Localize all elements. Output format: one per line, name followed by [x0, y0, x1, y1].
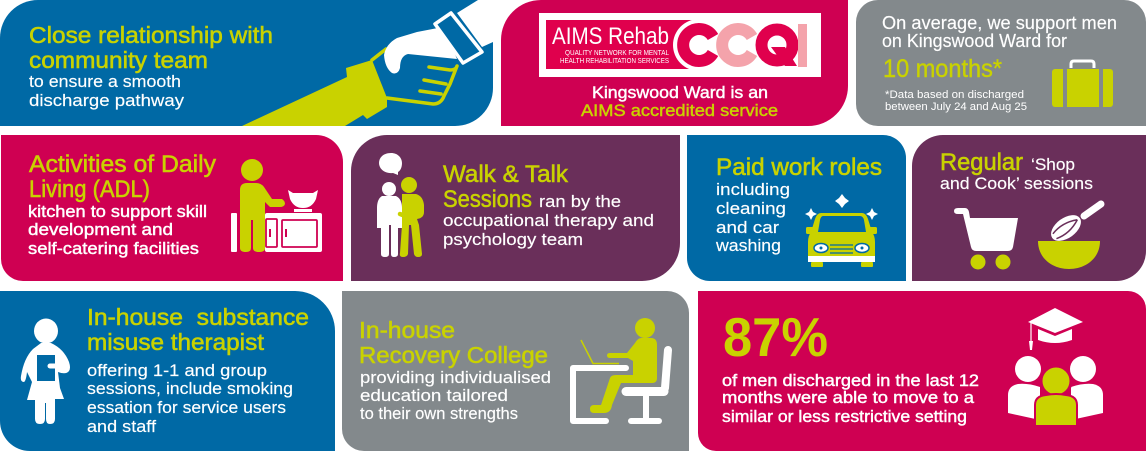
icon: whisk and bowl [1038, 204, 1101, 269]
text: average support [882, 13, 1117, 51]
heading: ADL [29, 151, 216, 203]
text: kitchen: kitchen to support skill [28, 202, 207, 221]
heading: walk and talk sessions: Walk & Talk [443, 161, 569, 188]
text: smooth discharge: discharge pathway [29, 91, 185, 110]
heading: substance misuse therapist: misuse therapist [87, 329, 265, 355]
panel: substance misuse therapist [0, 291, 335, 451]
text: sessions offered: and staff [87, 417, 156, 436]
stat: 87%: 87% [723, 306, 828, 368]
logo: AIMS Rehab CCQI: HEALTH REHABILITATION SERVICES [560, 56, 669, 65]
text: smooth discharge [29, 72, 185, 110]
panel: recovery college [342, 291, 689, 451]
text: individualised education: education tailored [360, 386, 508, 405]
icon: graduates [1008, 308, 1103, 426]
text: shop and cook sessions: ‘Shop [1031, 155, 1075, 174]
heading: walk and talk sessions [443, 161, 569, 213]
text: occupational therapy: occupational therapy and [443, 211, 654, 230]
panel: activities of daily living [1, 135, 343, 281]
heading: walk and talk sessions: Sessions [443, 186, 532, 213]
heading: close relationship [29, 22, 273, 73]
stat: 10 months: 10 months* [883, 55, 1002, 83]
footnote [885, 89, 1027, 113]
icon: handshake [242, 0, 493, 126]
icon: suitcase [1052, 61, 1113, 107]
text: kitchen: self-catering facilities [28, 239, 199, 258]
text: shop and cook sessions: and Cook’ sessions [940, 174, 1093, 193]
icon: clean car [805, 194, 878, 267]
footnote: between July 24 and Aug 25 [885, 101, 1027, 113]
logo: AIMS Rehab CCQI [539, 13, 821, 77]
text: cleaning and washing: cleaning [716, 199, 786, 218]
text: individualised education [360, 368, 551, 423]
heading: ADL: Living (ADL) [29, 176, 150, 203]
text: sessions offered: sessions, include smoking [87, 379, 293, 398]
heading: substance misuse therapist [87, 304, 309, 355]
text: shop and cook sessions [940, 155, 1093, 193]
text: cleaning and washing: and car [716, 218, 779, 237]
heading: recovery college [359, 317, 548, 368]
logo: AIMS Rehab CCQI: AIMS Rehab [552, 23, 669, 50]
panel: community team [0, 0, 493, 126]
heading: close relationship: Close relationship with [29, 22, 273, 48]
text: sessions offered [87, 361, 293, 436]
text: discharge outcome: of men discharged in the last 12 [722, 371, 979, 390]
heading: substance misuse therapist: In-house substance [87, 304, 309, 330]
text: sessions offered: offering 1-1 and group [87, 361, 267, 380]
text: discharge outcome: months were able to move to a [722, 388, 975, 407]
panel: walk and talk [351, 135, 680, 281]
icon: person at desk with laptop [573, 318, 668, 421]
heading: ADL: Activities of Daily [29, 151, 216, 178]
icon: clinician with clipboard [21, 318, 70, 424]
icon: two people with speech bubble [377, 153, 424, 257]
text: average support: On average, we support men [882, 13, 1117, 33]
text: individualised education: providing individualised [360, 368, 551, 387]
heading: close relationship: community team [29, 47, 208, 73]
text: sessions offered: essation for service users [87, 398, 286, 417]
text: occupational therapy [443, 192, 654, 249]
heading: paid work: Paid work roles [716, 154, 882, 181]
heading: recovery college: Recovery College [359, 342, 548, 368]
text: smooth discharge: to ensure a smooth [29, 72, 181, 91]
logo: AIMS Rehab CCQI: QUALITY NETWORK FOR MENTAL [565, 48, 669, 57]
text: kitchen: development and [28, 220, 173, 239]
text: accredited service: AIMS accredited service [581, 101, 778, 120]
panel: paid work roles [687, 135, 906, 281]
text: average support: on Kingswood Ward for [882, 31, 1067, 51]
icon: shopping cart [954, 208, 1018, 270]
text: cleaning and washing [715, 180, 790, 255]
text: kitchen [28, 202, 207, 258]
panel: average stay [856, 0, 1146, 126]
heading: recovery college: In-house [359, 317, 455, 343]
text: discharge outcome [722, 371, 979, 426]
text: discharge outcome: similar or less restrictive setting [722, 407, 967, 426]
text: occupational therapy: psychology team [443, 230, 583, 249]
icon: person cooking [231, 159, 322, 252]
text: cleaning and washing: including [716, 180, 790, 199]
text: cleaning and washing: washing [715, 236, 781, 255]
footnote: *Data based on discharged [885, 89, 1024, 101]
text: accredited service [581, 83, 778, 120]
text: accredited service: Kingswood Ward is an [592, 83, 768, 102]
heading: regular: Regular [940, 149, 1023, 176]
panel: AIMS accreditation [501, 0, 848, 126]
text: individualised education: to their own strengths [360, 404, 518, 423]
panel: 87 percent outcome [698, 291, 1146, 451]
text: occupational therapy: ran by the [539, 192, 621, 211]
panel: shop and cook [912, 135, 1146, 281]
